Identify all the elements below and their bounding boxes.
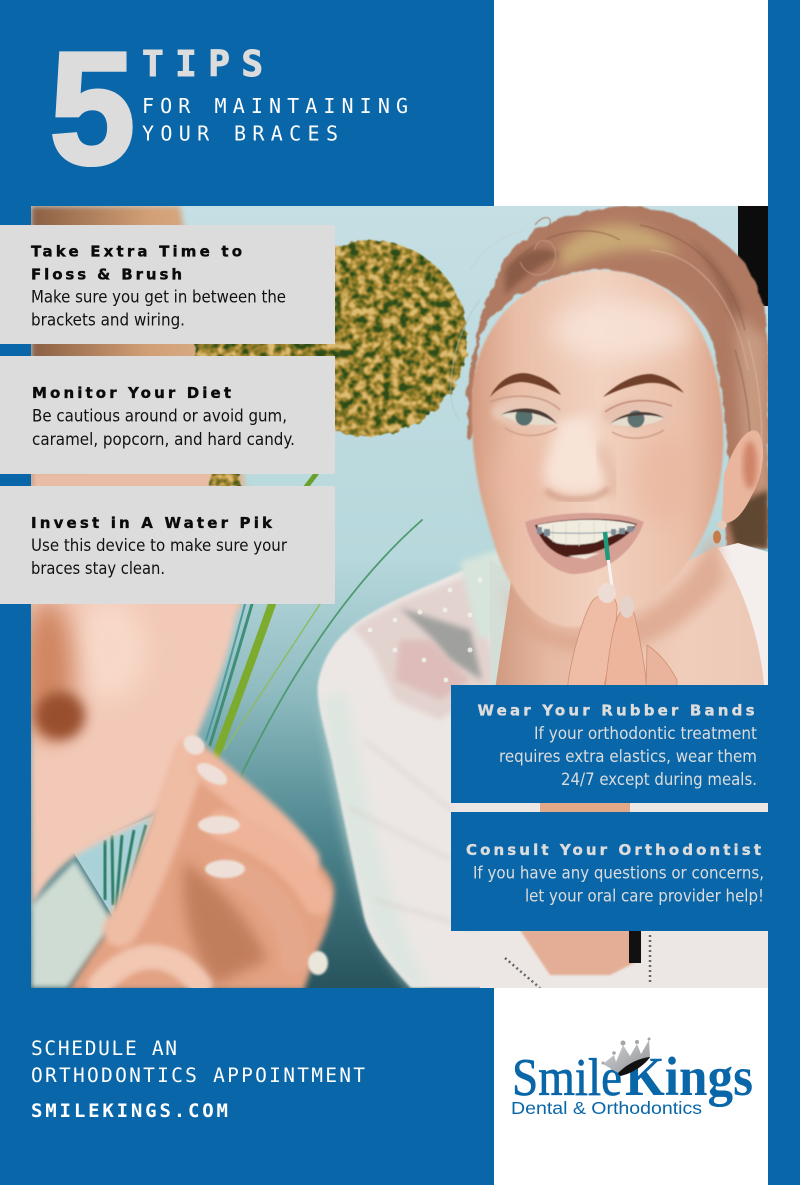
card: floss and brush: Floss & Brush	[31, 266, 182, 284]
card: water pik: braces stay clean.	[31, 559, 165, 578]
leaves seen under the reflected jaw	[72, 815, 155, 920]
eye sockets	[490, 398, 534, 426]
card: diet: Be cautious around or avoid gum,	[32, 406, 287, 426]
card: rubber bands: 24/7 except during meals.	[561, 770, 757, 789]
blurred foreground hand	[68, 741, 334, 990]
top white panel	[494, 0, 768, 206]
card: water pik	[0, 486, 335, 604]
eyes	[490, 396, 672, 438]
subtitle line two: YOUR BRACES	[142, 122, 338, 146]
bottom white panel	[494, 988, 768, 1185]
card: floss and brush: brackets and wiring.	[31, 310, 185, 330]
call to action: ORTHODONTICS APPOINTMENT	[31, 1064, 365, 1087]
smile with braces	[525, 513, 644, 574]
logo: Smile Kings: Smile	[512, 1049, 622, 1107]
call to action: SCHEDULE AN	[31, 1037, 177, 1060]
earring	[713, 520, 726, 544]
website: SMILEKINGS.COM	[31, 1100, 228, 1122]
title: TIPS: TIPS	[142, 44, 263, 85]
hair	[451, 206, 768, 548]
photo: woman with braces cleaning teeth in a mirror	[22, 206, 768, 990]
card: floss and brush	[0, 225, 335, 344]
neck and chest	[495, 545, 768, 690]
card heading: Consult Your Orthodontist	[466, 841, 761, 859]
reflected collar	[31, 860, 114, 988]
ear	[722, 430, 763, 523]
card: rubber bands: If your orthodontic treatment	[534, 724, 757, 743]
card: orthodontist	[451, 812, 768, 931]
call to action	[31, 1037, 365, 1122]
card: rubber bands: requires extra elastics, wear them	[499, 747, 757, 766]
card: orthodontist: let your oral care provider help!	[525, 886, 764, 906]
card: orthodontist: If you have any questions or concerns,	[473, 864, 764, 882]
green leaves	[206, 474, 422, 782]
reflected blouse sleeve and torso	[318, 548, 768, 988]
subtitle line one: FOR MAINTAINING	[142, 94, 408, 118]
icon: crown	[602, 1038, 650, 1076]
fingers holding brush	[567, 583, 677, 690]
big number 5: 5	[50, 20, 135, 198]
card: rubber bands	[451, 685, 768, 803]
card: floss and brush: Make sure you get in between the	[31, 288, 286, 306]
card: diet: caramel, popcorn, and hard candy.	[32, 430, 295, 449]
eyebrows	[490, 373, 561, 397]
logo: Smile Kings: Dental & Orthodontics	[511, 1098, 702, 1118]
jaw shadow	[505, 530, 725, 652]
blurred foreground face and ear	[22, 600, 238, 910]
interdental brush	[605, 532, 612, 586]
card heading: Wear Your Rubber Bands	[478, 702, 755, 720]
card: water pik: Use this device to make sure your	[31, 536, 287, 555]
blurred fingernails and ring	[180, 731, 328, 975]
face	[472, 270, 723, 627]
plant ball	[195, 240, 467, 487]
card heading: Monitor Your Diet	[32, 384, 231, 402]
card heading: Take Extra Time to	[31, 242, 242, 260]
nose	[544, 415, 608, 493]
blurred skin strip behind cards	[31, 206, 248, 486]
logo: Smile Kings: Kings	[625, 1046, 753, 1107]
card heading: Invest in A Water Pik	[31, 514, 273, 532]
logo: Smile Kings	[511, 1038, 753, 1118]
card: diet	[0, 356, 335, 474]
